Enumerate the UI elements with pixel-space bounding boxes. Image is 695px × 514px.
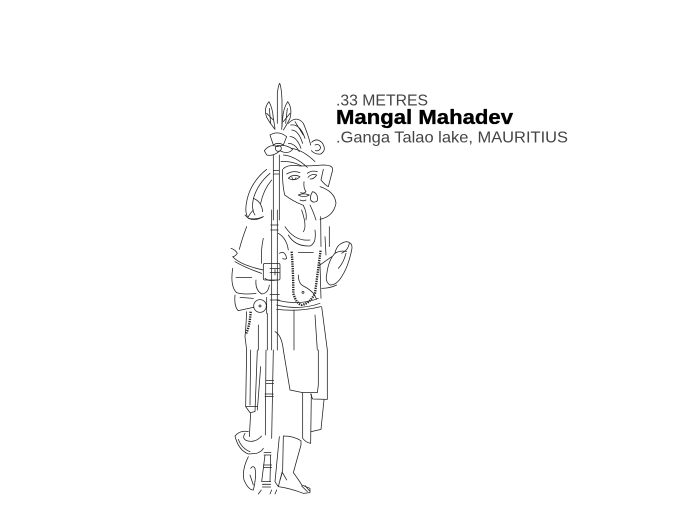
torso, arms and waist bbox=[231, 210, 352, 350]
height text: .33 METRES bbox=[336, 92, 428, 110]
trident and head bbox=[246, 83, 336, 220]
location text: .Ganga Talao lake, MAURITIUS bbox=[336, 130, 568, 146]
statue illustration: Mangal Mahadev line drawing bbox=[231, 83, 352, 494]
lower robe, staff, axe and foot bbox=[235, 350, 327, 494]
heading block bbox=[336, 92, 568, 146]
statue name title: Mangal Mahadev bbox=[336, 107, 514, 129]
